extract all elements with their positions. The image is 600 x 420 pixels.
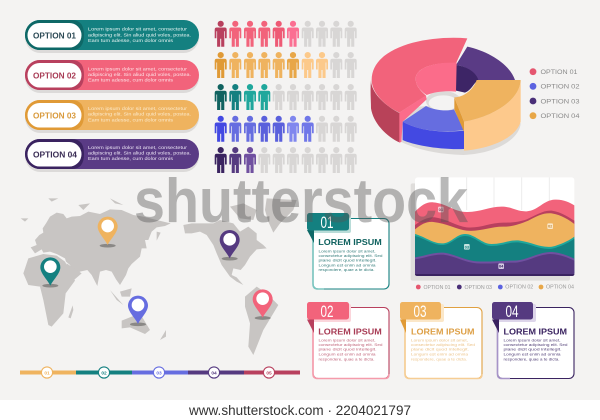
card 04: 04 — [506, 303, 518, 321]
data label 03: 03 — [465, 244, 470, 249]
option 03 pill: adipiscing elit. Sin aliud quid voles, postea. — [88, 112, 191, 117]
option 04 pill: adipiscing elit. Sin aliud quid voles, postea. — [88, 150, 191, 156]
layer: orange — [415, 213, 574, 273]
card 03 — [400, 302, 482, 378]
card 01: Lorem ipsum dolor sit amet, — [318, 249, 376, 253]
card 03: 03 — [414, 303, 426, 321]
option 04 pill — [25, 139, 199, 172]
card 01: consectetur adipiscing elit. Sed — [318, 254, 382, 258]
legend option 01: OPTION 01 — [424, 285, 451, 291]
card 04: consectetur adipiscing elit. Sed — [504, 343, 568, 347]
segment: option 03 purple — [456, 47, 515, 93]
card 03: Longum est enim ad omnia — [411, 352, 469, 356]
pin: blue — [128, 296, 148, 324]
wave area chart — [411, 177, 574, 281]
option 03 pill — [25, 100, 199, 133]
pin: orange — [98, 217, 118, 245]
data label 01: 01 — [439, 207, 444, 212]
option 03 pill: OPTION 03 — [33, 112, 77, 120]
option list panel — [25, 20, 199, 172]
pin: red — [253, 289, 273, 318]
timeline node 05 — [263, 367, 275, 378]
legend option 03: OPTION 03 — [464, 285, 492, 291]
option 01 pill: Lorem ipsum dolor sit amet, consectetur — [88, 27, 188, 32]
people row 4 — [215, 116, 357, 142]
data label 01 — [438, 207, 444, 212]
segment: option 02 blue — [403, 106, 464, 149]
pin: teal — [40, 257, 60, 286]
card 02 — [307, 302, 389, 378]
card 01: plane dicit quod intellegit. — [318, 259, 376, 263]
card 01: 01 — [320, 214, 334, 232]
card 03: plane dicit quod intellegit. — [411, 348, 469, 352]
card 01: respondere, quae a te dicta. — [318, 268, 374, 272]
3D donut chart — [371, 38, 521, 155]
legend item option 02: OPTION 02 — [540, 84, 580, 91]
watermark: shutterstock — [134, 167, 468, 236]
card 03: respondere, quae a te dicta. — [411, 357, 467, 361]
people row 3 — [215, 84, 357, 110]
timeline node 02 — [98, 367, 110, 378]
card 04: plane dicit quod intellegit. — [504, 348, 562, 352]
card 03: Lorem ipsum dolor sit amet, — [411, 338, 468, 342]
people row 5 — [215, 147, 357, 173]
people row 2 — [215, 52, 357, 78]
option 01 pill — [25, 20, 199, 53]
data label 02 — [547, 223, 553, 229]
footer image id: www.shutterstock.com · 2204021797 — [188, 403, 411, 418]
legend item option 01: OPTION 01 — [540, 69, 578, 76]
option 01 pill: Eam tum adesse, cum dolor omnis — [88, 38, 174, 43]
card 04: respondere, quae a te dicta. — [504, 357, 560, 361]
donut legend — [530, 68, 580, 120]
card 04 — [492, 302, 574, 378]
timeline node 01: 01 — [44, 370, 50, 376]
data label 03 — [464, 244, 470, 250]
chart legend — [416, 285, 574, 291]
option 03 pill: Lorem ipsum dolor sit amet, consectetur — [88, 106, 188, 111]
pictogram chart of people — [215, 21, 357, 173]
pin: purple — [220, 230, 240, 258]
card 01: LOREM IPSUM — [318, 238, 382, 247]
card 01: Longum est enim ad omnia — [318, 263, 377, 267]
option 03 pill: Eam tum adesse, cum dolor omnis — [88, 117, 174, 122]
layer: purple — [415, 254, 574, 276]
legend option 04: OPTION 04 — [546, 285, 574, 291]
card 04: LOREM IPSUM — [504, 328, 567, 337]
timeline node 04 — [208, 367, 220, 378]
card 04: Longum est enim ad omnia — [504, 352, 562, 356]
legend item option 03: OPTION 03 — [540, 98, 580, 105]
segment: option 04 orange — [454, 80, 521, 151]
legend item option 04: OPTION 04 — [540, 113, 580, 120]
timeline node 03 — [153, 367, 165, 378]
card 02: LOREM IPSUM — [318, 328, 382, 337]
data label 04: 04 — [499, 264, 504, 269]
option 01 pill: adipiscing elit. Sin aliud quid voles, postea. — [88, 32, 191, 37]
option 04 pill: OPTION 04 — [33, 150, 78, 160]
timeline node 05: 05 — [266, 370, 272, 376]
option 04 pill: Lorem ipsum dolor sit amet, consectetur — [88, 145, 188, 150]
card 03: LOREM IPSUM — [411, 328, 475, 337]
card 02: Longum est enim ad omnia — [318, 352, 377, 356]
option 02 pill: Eam tum adesse, cum dolor omnis — [88, 78, 174, 83]
option 02 pill: Lorem ipsum dolor sit amet, consectetur — [88, 66, 188, 71]
card 02: consectetur adipiscing elit. Sed — [318, 343, 382, 347]
data label 02: 02 — [548, 224, 553, 229]
timeline node 03: 03 — [156, 370, 162, 376]
legend option 02: OPTION 02 — [505, 285, 533, 291]
card 02: Lorem ipsum dolor sit amet, — [318, 338, 376, 342]
card 04: Lorem ipsum dolor sit amet, — [504, 338, 560, 342]
timeline node 02: 02 — [101, 370, 107, 376]
option 01 pill: OPTION 01 — [33, 32, 77, 40]
layer: red — [415, 200, 574, 273]
card 03: consectetur adipiscing elit. Sed — [411, 343, 475, 347]
card 02: 02 — [320, 303, 334, 321]
card 01 — [307, 213, 389, 289]
timeline — [20, 367, 300, 378]
map landmasses — [21, 198, 297, 355]
segment: option 01 red — [371, 38, 467, 143]
option 02 pill: adipiscing elit. Sin aliud quid voles, postea. — [88, 72, 191, 77]
option 02 pill — [25, 60, 199, 93]
world map with pins — [21, 198, 297, 355]
timeline node 01 — [41, 367, 53, 378]
people row 1 — [215, 21, 357, 47]
card 02: plane dicit quod intellegit. — [318, 348, 376, 352]
card 02: respondere, quae a te dicta. — [318, 357, 374, 361]
option 04 pill: Eam tum adesse, cum dolor omnis — [88, 156, 174, 161]
timeline node 04: 04 — [211, 370, 217, 376]
option 02 pill: OPTION 02 — [33, 72, 77, 80]
layer: teal — [415, 236, 574, 273]
data label 04 — [498, 263, 504, 269]
